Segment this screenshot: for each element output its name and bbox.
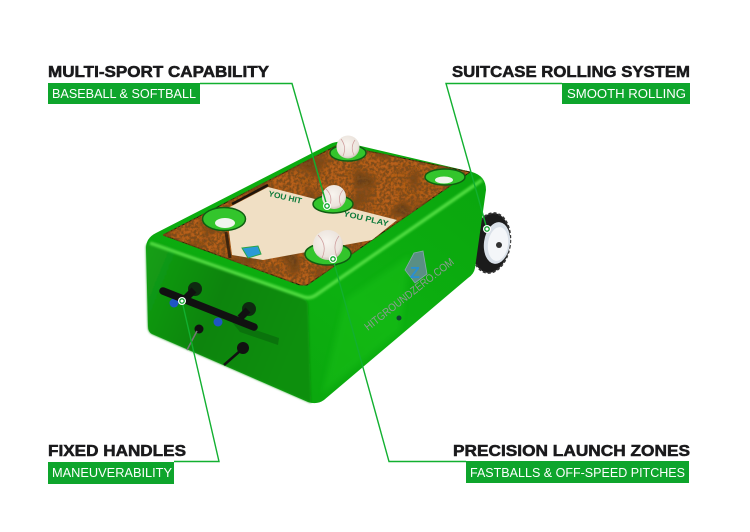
badge text: FASTBALLS & OFF-SPEED PITCHES xyxy=(470,466,685,480)
launch hole: centre with ball xyxy=(313,185,353,213)
launch hole: left xyxy=(202,208,246,230)
infield text: YOU HIT xyxy=(268,189,303,206)
leader line xyxy=(446,84,562,229)
infield text: YOU PLAY xyxy=(343,209,390,228)
callout: precision launch zones xyxy=(329,255,690,483)
badge text: SMOOTH ROLLING xyxy=(567,87,686,101)
heading: SUITCASE ROLLING SYSTEM xyxy=(452,64,690,81)
box body xyxy=(146,142,486,403)
left side face xyxy=(146,242,311,403)
leader line xyxy=(174,301,219,462)
leader line xyxy=(333,259,466,462)
launch hole: front with ball xyxy=(305,230,351,265)
leader line xyxy=(200,84,327,206)
marker xyxy=(329,255,337,263)
top rim highlight xyxy=(150,180,482,298)
heading: FIXED HANDLES xyxy=(48,443,186,460)
badge xyxy=(48,83,200,104)
marker xyxy=(483,225,491,233)
badge xyxy=(48,462,174,484)
wheel xyxy=(468,211,514,275)
plate logo xyxy=(242,246,261,258)
batter box line xyxy=(232,185,268,204)
launch hole: right xyxy=(425,169,465,185)
product: pitching machine box xyxy=(146,136,514,403)
plate shadow line xyxy=(226,232,230,258)
marker xyxy=(323,202,331,210)
callout: multi-sport capability xyxy=(48,64,331,210)
side reflection xyxy=(322,255,410,394)
badge xyxy=(562,83,690,104)
heading: MULTI-SPORT CAPABILITY xyxy=(48,64,269,81)
dirt top surface xyxy=(163,145,470,286)
callout: suitcase rolling system xyxy=(446,64,690,233)
heading: PRECISION LAUNCH ZONES xyxy=(453,443,690,460)
home plate infield xyxy=(228,187,397,260)
badge text: MANEUVERABILITY xyxy=(52,466,173,480)
handle shadow xyxy=(232,322,279,345)
badge text: BASEBALL & SOFTBALL xyxy=(52,87,196,101)
brand logo: Z xyxy=(410,265,420,282)
badge xyxy=(466,461,689,483)
brand name: HITGROUNDZERO.COM xyxy=(362,256,457,333)
infield text xyxy=(268,189,390,228)
handle xyxy=(163,282,279,345)
marker xyxy=(178,297,186,305)
brand logo xyxy=(405,251,427,283)
cables xyxy=(187,324,249,365)
screw xyxy=(396,316,402,320)
callout: fixed handles xyxy=(48,297,219,484)
launch hole: top with ball xyxy=(330,136,366,161)
